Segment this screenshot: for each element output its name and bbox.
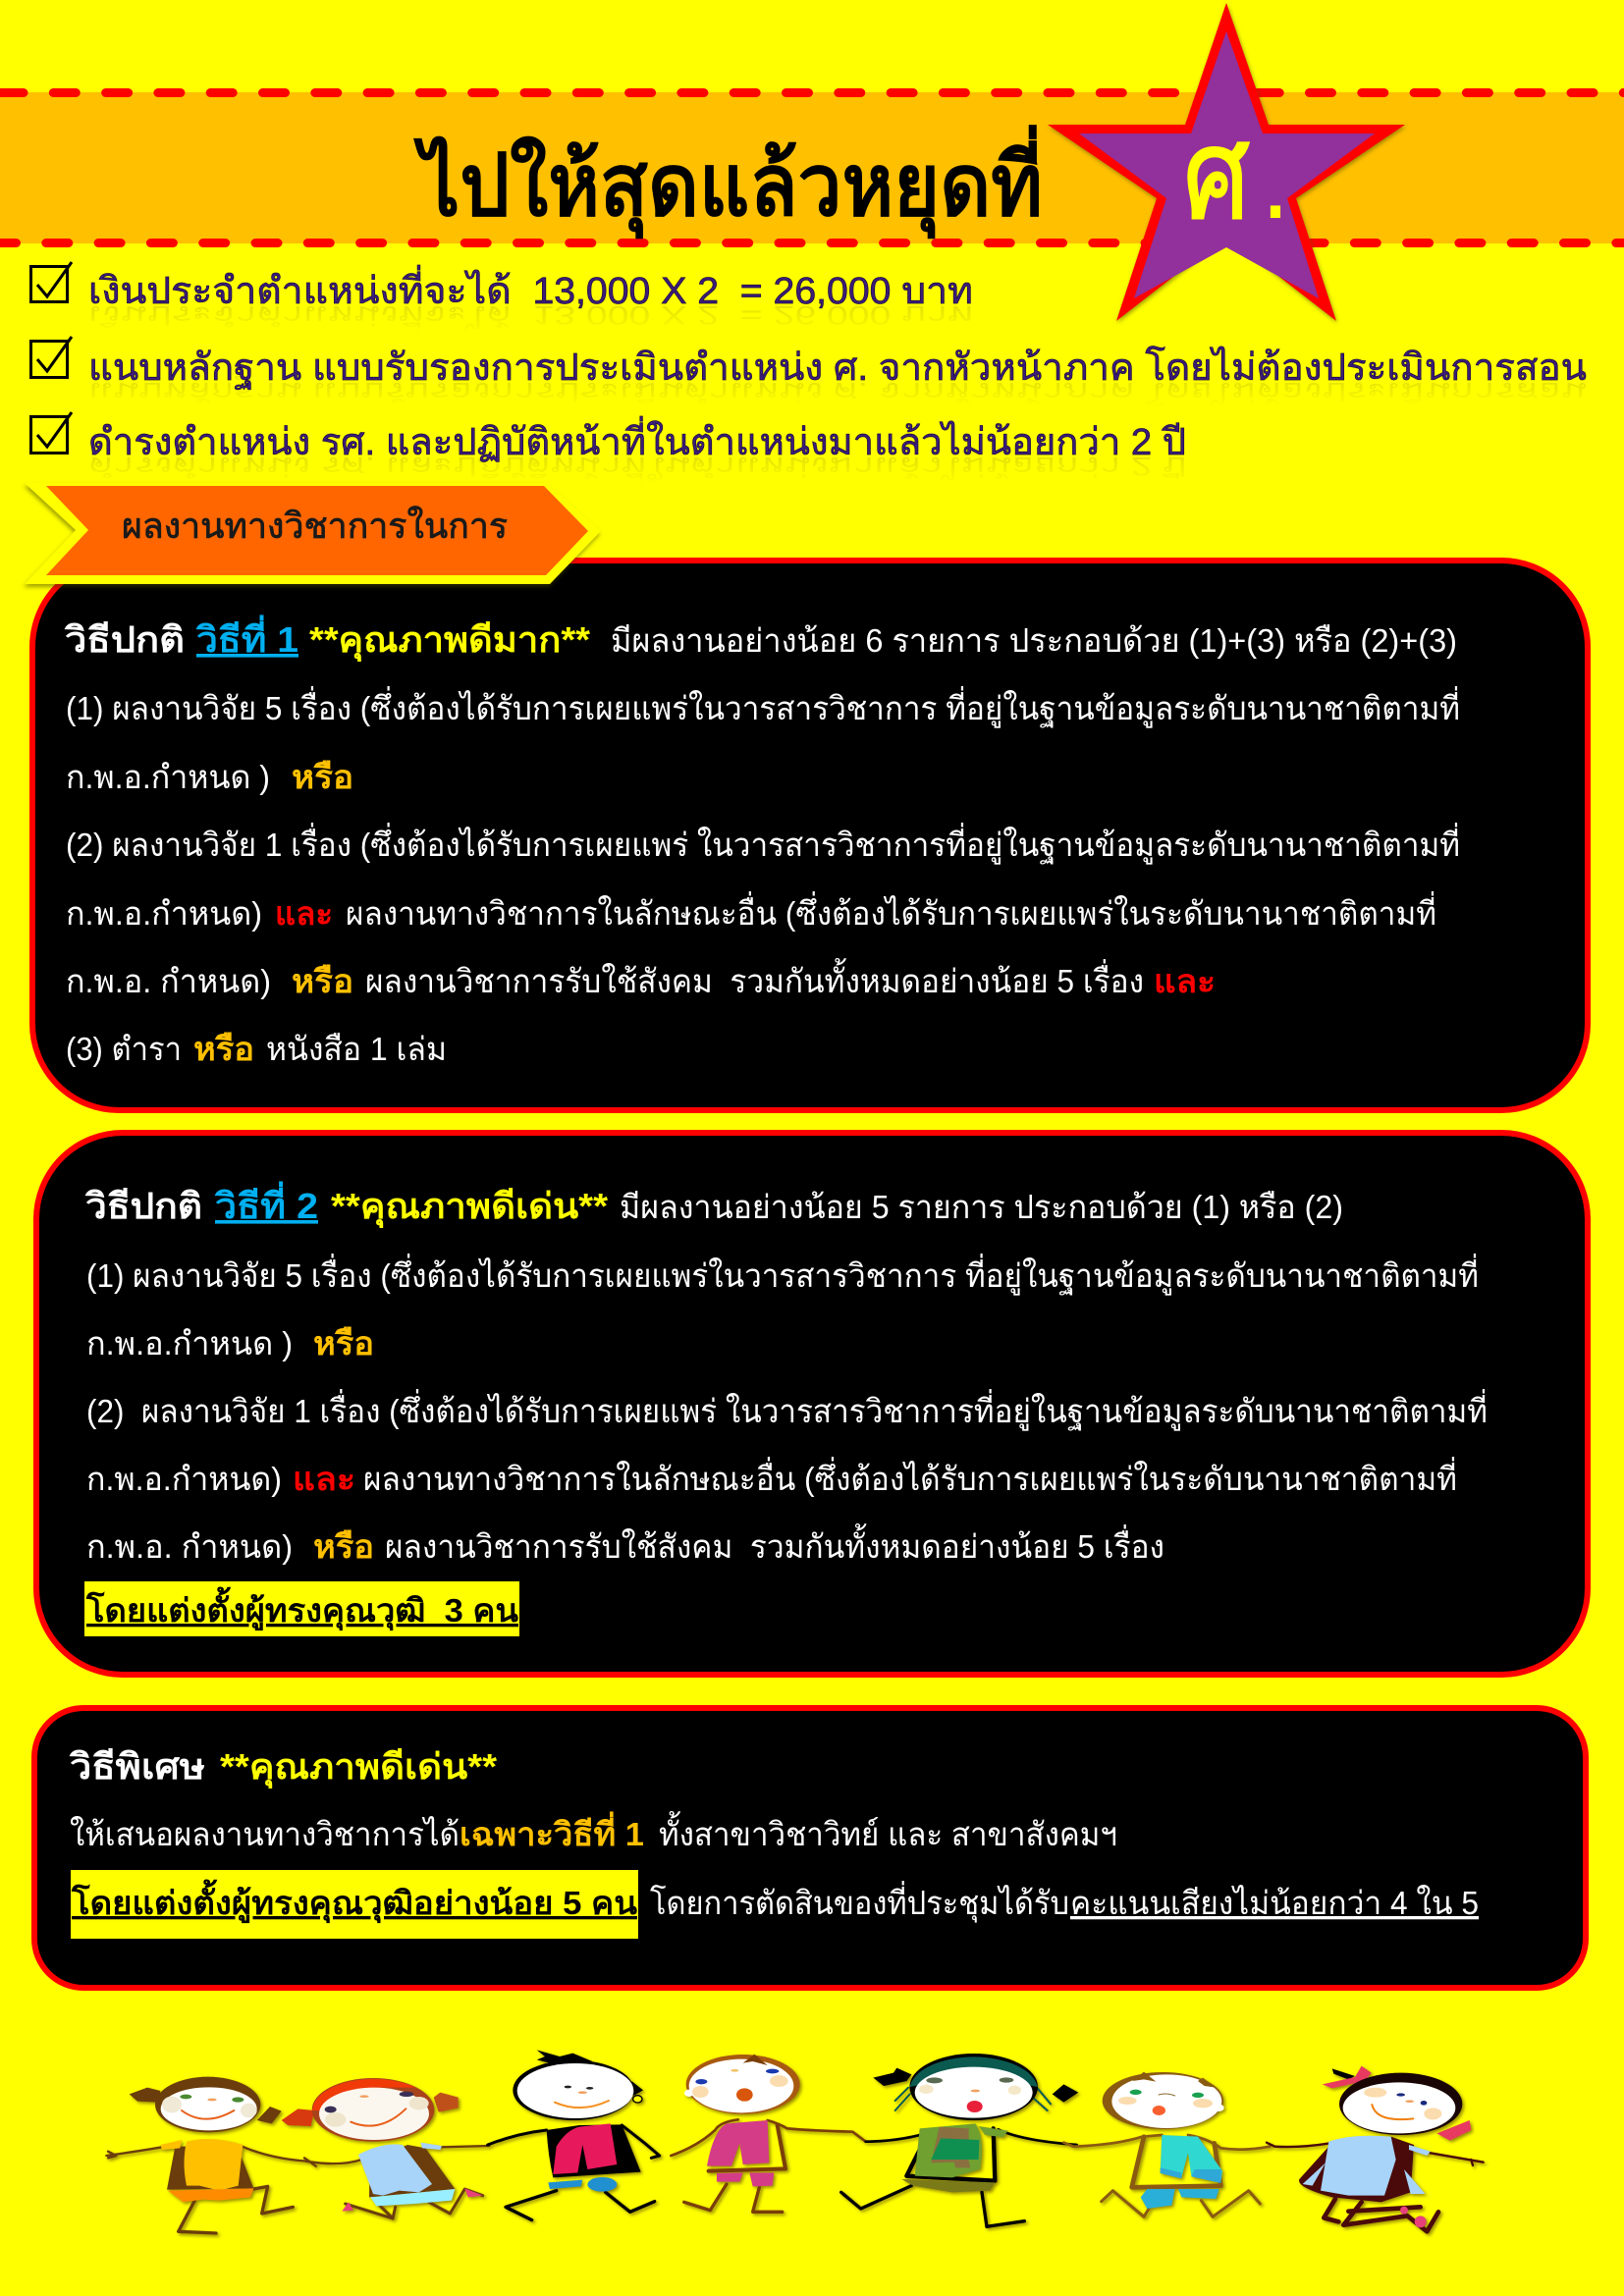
text: item 3 bbox=[66, 1031, 447, 1067]
kid 2 bbox=[282, 2078, 489, 2218]
kid 4 bbox=[671, 2055, 866, 2212]
panel: method 1 bbox=[32, 561, 1588, 1110]
banner label: ผลงานทางวิชาการในการ bbox=[122, 506, 508, 546]
text: item 2: ผลงานวิชาการรับใช้สังคม รวมกันทั้งหมดอย่างน้อย 5 เรื่อง bbox=[365, 958, 1144, 999]
heading line: method 1: วิธีปกติ bbox=[64, 619, 185, 660]
text: item 1: ก.พ.อ.กำหนด ) bbox=[86, 1325, 293, 1362]
checklist item 1: เงินประจำตำแหน่งที่จะได้ 13,000 X 2 = 26,000 บาท bbox=[88, 300, 973, 334]
checklist item 3: ดำรงตำแหน่ง รศ. และปฏิบัติหน้าที่ในตำแหน่งมาแล้วไม่น้อยกว่า 2 ปี bbox=[88, 452, 1186, 485]
heading line: method 2: วิธีปกติ bbox=[84, 1186, 202, 1226]
text: item 2: ผลงานทางวิชาการในลักษณะอื่น (ซึ่งต้องได้รับการเผยแพร่ในระดับนานาชาติตามที่ bbox=[346, 891, 1436, 932]
heading line: method 1 bbox=[64, 614, 1457, 663]
text: item 1: (1) ผลงานวิจัย 5 เรื่อง (ซึ่งต้องได้รับการเผยแพร่ในวารสารวิชาการ ที่อยู่ในฐานข้อมูลระดับนานาชาติตามที่ bbox=[66, 686, 1460, 728]
text: vote requirement bbox=[650, 1881, 1479, 1923]
text: item 1: (1) ผลงานวิจัย 5 เรื่อง (ซึ่งต้องได้รับการเผยแพร่ในวารสารวิชาการ ที่อยู่ในฐานข้อมูลระดับนานาชาติตามที่ bbox=[86, 1254, 1479, 1296]
title: ไปให้สุดแล้วหยุดที่ bbox=[413, 125, 1043, 240]
heading line: method 1: วิธีที่ 1 bbox=[195, 614, 298, 660]
heading line: method 2: มีผลงานอย่างน้อย 5 รายการ ประกอบด้วย (1) หรือ (2) bbox=[620, 1189, 1343, 1225]
text: item 2 bbox=[66, 823, 1460, 999]
text: item 3: หนังสือ 1 เล่ม bbox=[266, 1031, 447, 1067]
heading line: method 1: **คุณภาพดีมาก** bbox=[309, 619, 590, 663]
highlight: 5 experts: โดยแต่งตั้งผู้ทรงคุณวุฒิอย่างน้อย 5 คน bbox=[71, 1879, 637, 1924]
icon: star badge bbox=[1048, 3, 1405, 321]
highlight: 5 experts bbox=[71, 1870, 638, 1939]
kid 5 bbox=[841, 2054, 1078, 2226]
text: item 2: ผลงานทางวิชาการในลักษณะอื่น (ซึ่งต้องได้รับการเผยแพร่ในระดับนานาชาติตามที่ bbox=[363, 1457, 1457, 1497]
text: item 1 bbox=[86, 1254, 1479, 1362]
text: item 2: และ bbox=[293, 1461, 355, 1497]
text: special method body: เฉพาะวิธีที่ 1 bbox=[460, 1811, 644, 1852]
checklist item 2: แนบหลักฐาน แบบรับรองการประเมินตำแหน่ง ศ. จากหัวหน้าภาค โดยไม่ต้องประเมินการสอน bbox=[88, 346, 1587, 390]
checklist item 1 bbox=[31, 262, 973, 334]
heading line: method 2 bbox=[84, 1181, 1343, 1229]
text: item 2: หรือ bbox=[292, 963, 353, 999]
banner arrow bbox=[25, 483, 601, 584]
text: item 2: (2) ผลงานวิจัย 1 เรื่อง (ซึ่งต้องได้รับการเผยแพร่ ในวารสารวิชาการที่อยู่ในฐานข้อมูลระดับนานาชาติตามที่ bbox=[86, 1389, 1488, 1431]
text: item 2: (2) ผลงานวิจัย 1 เรื่อง (ซึ่งต้องได้รับการเผยแพร่ ในวารสารวิชาการที่อยู่ในฐานข้อมูลระดับนานาชาติตามที่ bbox=[66, 823, 1460, 865]
kid 6 bbox=[1063, 2072, 1270, 2216]
heading line: special method bbox=[69, 1746, 497, 1789]
heading line: method 2: **คุณภาพดีเด่น** bbox=[331, 1186, 608, 1229]
star letter period: . bbox=[1266, 143, 1285, 236]
heading line: special method: **คุณภาพดีเด่น** bbox=[220, 1746, 497, 1789]
heading line: method 1: มีผลงานอย่างน้อย 6 รายการ ประกอบด้วย (1)+(3) หรือ (2)+(3) bbox=[611, 622, 1457, 659]
panel: method 2 bbox=[36, 1133, 1588, 1675]
text: item 2: ผลงานวิชาการรับใช้สังคม รวมกันทั้งหมดอย่างน้อย 5 เรื่อง bbox=[385, 1523, 1164, 1565]
checklist item 2 bbox=[31, 337, 1587, 406]
text: item 3: (3) ตำรา bbox=[66, 1031, 182, 1067]
text: item 3: หรือ bbox=[193, 1031, 254, 1067]
highlight: 3 experts: โดยแต่งตั้งผู้ทรงคุณวุฒิ 3 คน bbox=[85, 1586, 518, 1631]
kid 3 bbox=[488, 2050, 660, 2220]
illustration: children holding hands bbox=[106, 2050, 1484, 2233]
star letter: ศ bbox=[1183, 105, 1250, 245]
text: item 1: หรือ bbox=[313, 1325, 374, 1362]
text: item 2: ก.พ.อ. กำหนด) bbox=[86, 1528, 293, 1565]
text: item 2: ก.พ.อ. กำหนด) bbox=[66, 963, 271, 999]
text: item 2: ก.พ.อ.กำหนด) bbox=[86, 1461, 282, 1497]
kid 1 bbox=[106, 2077, 307, 2233]
highlight: 3 experts bbox=[84, 1581, 519, 1636]
text: item 2: และ bbox=[275, 895, 333, 932]
checklist item 1: เงินประจำตำแหน่งที่จะได้ 13,000 X 2 = 26,000 บาท bbox=[88, 265, 973, 312]
text: item 2: หรือ bbox=[313, 1528, 374, 1565]
text: special method body: ทั้งสาขาวิชาวิทย์ และ สาขาสังคมฯ bbox=[659, 1811, 1117, 1852]
text: item 1: หรือ bbox=[292, 759, 353, 795]
checklist item 3: ดำรงตำแหน่ง รศ. และปฏิบัติหน้าที่ในตำแหน่งมาแล้วไม่น้อยกว่า 2 ปี bbox=[88, 416, 1186, 463]
kid 7 bbox=[1267, 2066, 1484, 2231]
header band bbox=[0, 92, 1624, 243]
heading line: method 2: วิธีที่ 2 bbox=[214, 1181, 318, 1226]
checklist item 3 bbox=[31, 412, 1186, 485]
text: item 1 bbox=[66, 686, 1460, 795]
text: item 1: ก.พ.อ.กำหนด ) bbox=[66, 759, 270, 795]
text: item 2: และ bbox=[1154, 963, 1216, 999]
text: item 2: ก.พ.อ.กำหนด) bbox=[66, 895, 262, 932]
heading line: special method: วิธีพิเศษ bbox=[69, 1746, 205, 1787]
text: special method body: ให้เสนอผลงานทางวิชาการได้ bbox=[70, 1816, 460, 1852]
text: special method body bbox=[70, 1811, 1117, 1852]
checklist item 2: แนบหลักฐาน แบบรับรองการประเมินตำแหน่ง ศ. จากหัวหน้าภาค โดยไม่ต้องประเมินการสอน bbox=[88, 376, 1587, 406]
text: vote requirement: คะแนนเสียงไม่น้อยกว่า 4 ใน 5 bbox=[1070, 1885, 1479, 1921]
text: vote requirement: โดยการตัดสินของที่ประชุมได้รับ bbox=[650, 1881, 1069, 1923]
panel: special method bbox=[34, 1708, 1586, 1988]
text: item 2 bbox=[86, 1389, 1488, 1565]
